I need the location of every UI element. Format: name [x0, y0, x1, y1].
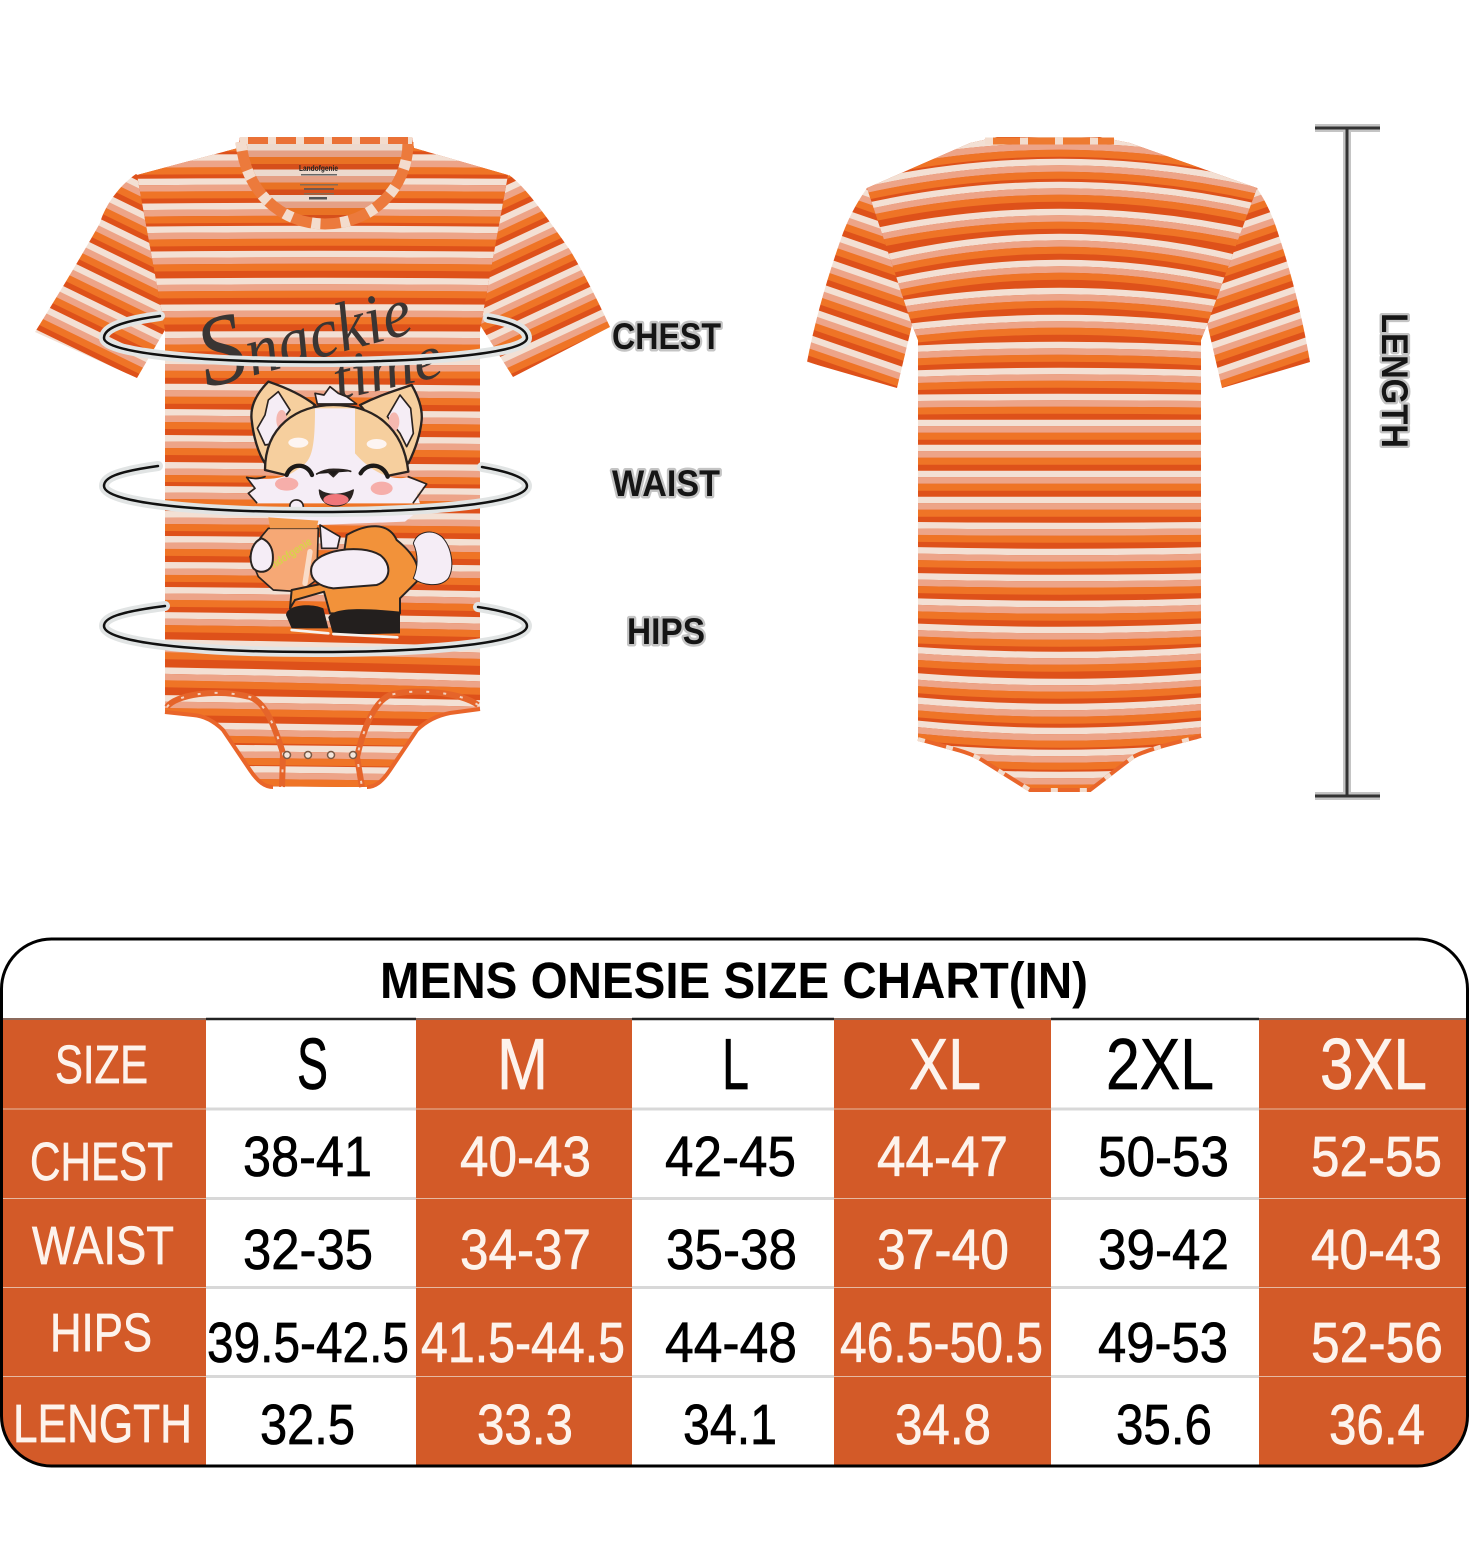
- row dividers on white: [206, 1109, 1259, 1376]
- fox blaze and muzzle: [247, 408, 427, 503]
- fox paw mark: [290, 500, 303, 507]
- fox body and legs: [290, 526, 418, 613]
- neck opening: [243, 137, 408, 220]
- length label: LENGTH: [1374, 313, 1415, 448]
- back hem binding: [918, 736, 1201, 790]
- crotch snaps: [284, 752, 356, 758]
- back body: [850, 130, 1270, 800]
- waist row: 39-42: [1098, 1218, 1229, 1282]
- neck label: Landofgenie: [299, 164, 338, 173]
- length row: 34.1: [683, 1393, 777, 1457]
- table title: MENS ONESIE SIZE CHART(IN): [380, 952, 1088, 1009]
- length row: [260, 1393, 1425, 1457]
- size headers: XL: [909, 1025, 981, 1105]
- fox mouth: [319, 490, 353, 506]
- fox ear fur: [257, 392, 290, 445]
- hips label: HIPS: [627, 611, 705, 652]
- row dividers on orange: [2, 1109, 1467, 1376]
- leg binding: [165, 692, 480, 787]
- size headers: M: [497, 1025, 548, 1105]
- chest row: 38-41: [243, 1125, 372, 1189]
- chest row: 42-45: [665, 1125, 796, 1189]
- fox right paw: [413, 532, 452, 585]
- length row: 34.8: [895, 1393, 991, 1457]
- fox left paw: [251, 538, 273, 572]
- title divider: [2, 1018, 1467, 1020]
- back left sleeve: [807, 188, 930, 388]
- fox nose: [317, 469, 351, 477]
- waist row: 40-43: [1311, 1218, 1442, 1282]
- hips row: 41.5-44.5: [421, 1311, 625, 1375]
- honey jar: [250, 528, 318, 592]
- hips row: 44-48: [665, 1311, 797, 1375]
- fox cheeks: [275, 477, 298, 491]
- fox mascot: [247, 382, 452, 637]
- waist row: 34-37: [460, 1218, 591, 1282]
- chest row: 44-47: [877, 1125, 1008, 1189]
- fox ears: [251, 382, 315, 463]
- fox eye spots: [288, 438, 308, 448]
- fox chest: [320, 525, 340, 548]
- chest label: CHEST: [612, 316, 721, 357]
- back onesie illustration: [807, 130, 1310, 800]
- row headers: CHEST: [30, 1132, 173, 1192]
- hips row: [207, 1311, 1443, 1375]
- length measure bar: [1315, 128, 1380, 796]
- row headers: SIZE: [55, 1035, 148, 1095]
- frame outline: [2, 939, 1468, 1466]
- hips row: 46.5-50.5: [840, 1311, 1043, 1375]
- size headers: L: [722, 1025, 749, 1105]
- fox eyes: [287, 466, 388, 477]
- fox mascot: ndofgenie: [269, 536, 314, 571]
- size headers: 3XL: [1320, 1025, 1427, 1105]
- hips row: 52-56: [1311, 1311, 1443, 1375]
- waist row: 32-35: [243, 1218, 373, 1282]
- chest row: 40-43: [460, 1125, 591, 1189]
- waist row: 37-40: [877, 1218, 1009, 1282]
- front right sleeve: [470, 175, 610, 377]
- fox head: [265, 405, 408, 487]
- length row: 35.6: [1116, 1393, 1212, 1457]
- waist measure ring: [104, 466, 527, 512]
- length row: 33.3: [477, 1393, 573, 1457]
- orange columns: [2, 1019, 1468, 1466]
- fox chin: [267, 513, 413, 525]
- hips row: 39.5-42.5: [207, 1311, 409, 1375]
- row headers: [13, 1035, 192, 1454]
- back right sleeve: [1190, 188, 1310, 388]
- forehead tuft: [315, 387, 357, 404]
- size chart table: [2, 939, 1468, 1466]
- front body: [130, 130, 520, 805]
- size headers: 2XL: [1106, 1025, 1214, 1105]
- waist row: 35-38: [666, 1218, 797, 1282]
- chest measure ring: [104, 316, 527, 362]
- back collar: [985, 138, 1114, 144]
- slogan: Snackie time: time: [326, 323, 448, 414]
- table frame: [2, 939, 1468, 1466]
- waist label: WAIST: [612, 463, 720, 504]
- neck label: [299, 164, 338, 200]
- hips row: 49-53: [1098, 1311, 1228, 1375]
- chest row: 50-53: [1098, 1125, 1229, 1189]
- fox arm: [311, 549, 388, 588]
- chest row: 52-55: [1311, 1125, 1442, 1189]
- size headers: S: [297, 1025, 328, 1105]
- waist row: [243, 1218, 1442, 1282]
- fox shoes: [286, 605, 328, 628]
- front onesie illustration: [35, 130, 610, 805]
- collar: [240, 140, 412, 224]
- length row: 32.5: [260, 1393, 355, 1457]
- length row: 36.4: [1329, 1393, 1425, 1457]
- row headers: WAIST: [32, 1216, 174, 1276]
- hips measure ring: [104, 606, 527, 652]
- chest row: [243, 1125, 1442, 1189]
- row headers: LENGTH: [13, 1394, 192, 1454]
- size headers: [297, 1025, 1427, 1105]
- slogan: Snackie time: Snackie: [184, 246, 421, 409]
- row headers: HIPS: [50, 1303, 152, 1363]
- title divider over white columns: [206, 1018, 1259, 1020]
- front left sleeve: [35, 174, 175, 378]
